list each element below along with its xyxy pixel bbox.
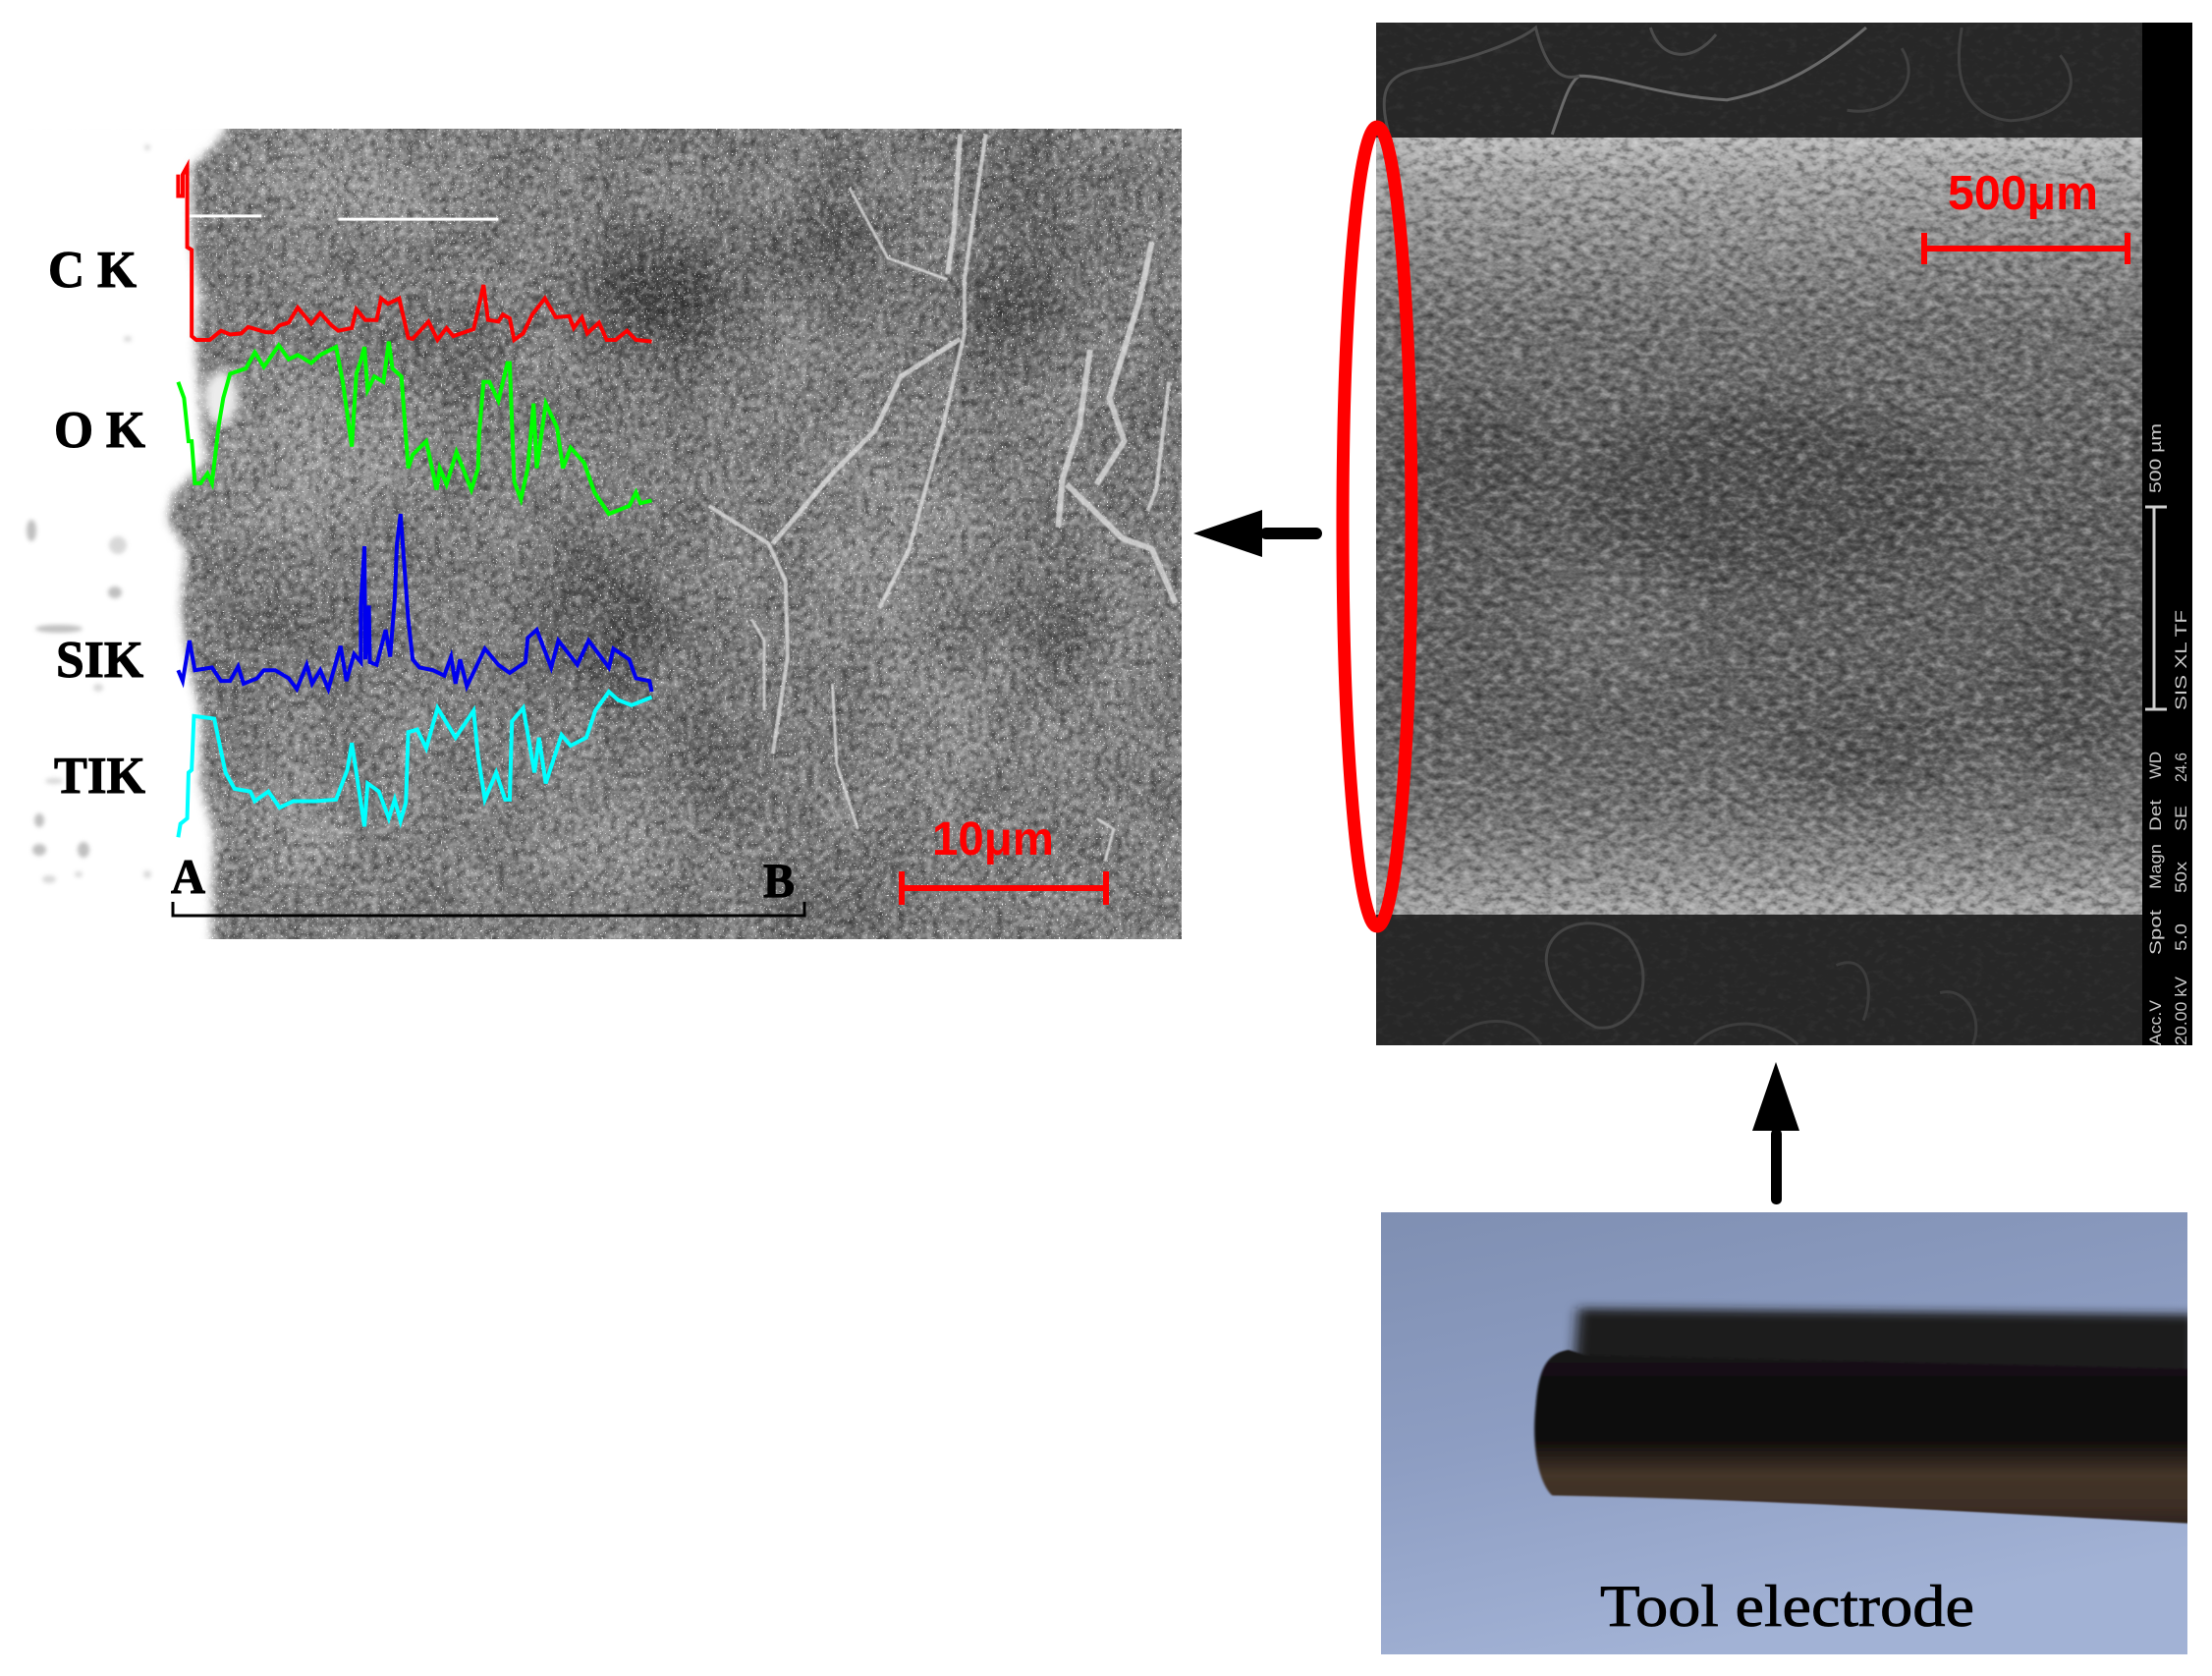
scale bar: 10 µm: 10μm: [932, 813, 1054, 866]
instrument metadata: SIS XL TF: [2172, 610, 2190, 710]
label: TIK: TIK: [54, 748, 145, 805]
instrument metadata: 5.0: [2172, 923, 2190, 951]
photo caption: Tool electrode: [1600, 1574, 1974, 1639]
instrument metadata: SE: [2172, 806, 2190, 831]
label: O K: O K: [54, 402, 145, 459]
arrow: left toward scan: [1193, 510, 1322, 557]
panel: EDS line scan micrograph: [0, 118, 1182, 973]
instrument metadata: 20.00 kV: [2172, 976, 2190, 1045]
line: O K: [178, 342, 652, 514]
label: C K: C K: [48, 242, 137, 299]
instrument metadata: Magn: [2146, 844, 2165, 889]
element labels: [48, 242, 795, 908]
arrow: up toward SEM image: [1752, 1062, 1799, 1204]
bright ridges: [709, 134, 1176, 862]
instrument metadata: 24.6: [2172, 753, 2190, 782]
callout: red ellipse on electrode end: [1343, 127, 1411, 926]
white fade on left of scan: [0, 118, 228, 968]
specks on faded margin: [27, 144, 151, 883]
scale bar: 10 µm: [899, 813, 1109, 905]
label: A: A: [171, 849, 205, 904]
line: TI K: [178, 692, 652, 837]
line: C K: [178, 166, 652, 342]
background substrate curves: [1384, 28, 2071, 1044]
instrument metadata: 50x: [2172, 861, 2190, 893]
label: B: B: [763, 853, 795, 908]
scale bar: 500 µm: [1921, 167, 2130, 264]
rod shadow band: [1565, 1301, 2187, 1369]
white marker dashes: [190, 216, 498, 219]
instrument metadata: WD: [2146, 752, 2165, 779]
electrode body: [1376, 138, 2142, 915]
chart: EDS element line scans: [178, 166, 652, 837]
instrument metadata: Det: [2146, 800, 2165, 831]
line: SI K: [178, 514, 652, 692]
instrument metadata: Acc.V: [2146, 999, 2165, 1045]
instrument metadata: [2149, 424, 2186, 1045]
electrode rod: [1534, 1350, 2196, 1524]
scan line bracket A to B: [173, 902, 804, 916]
black data band: [2142, 23, 2192, 1045]
scale bar: 500 µm: 500μm: [1948, 167, 2098, 220]
instrument metadata: Spot: [2146, 910, 2165, 955]
tonal blotches: [197, 141, 1178, 934]
instrument scale: [2145, 507, 2167, 710]
panel: SEM image of electrode: [1376, 23, 2192, 1045]
instrument metadata: 500 µm: [2146, 423, 2165, 493]
label: SIK: SIK: [56, 632, 143, 689]
panel: photograph of tool electrode: [1381, 1212, 2196, 1654]
